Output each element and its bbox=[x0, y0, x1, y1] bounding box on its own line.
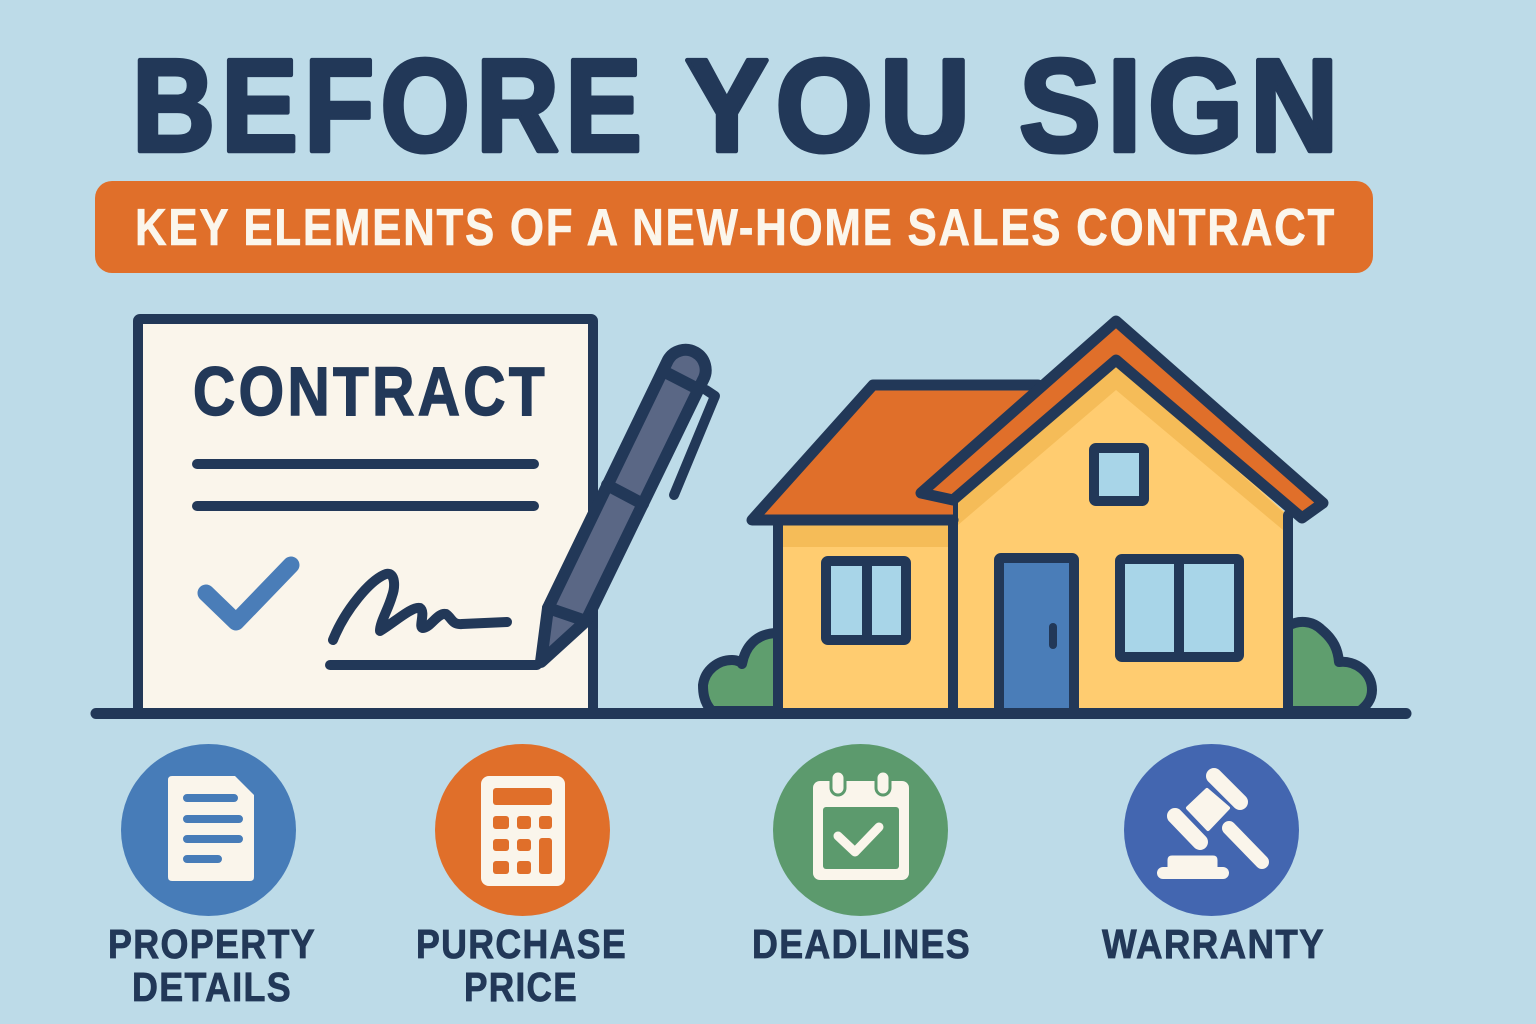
label: property details: PROPERTY bbox=[108, 921, 316, 967]
label: purchase price: PRICE bbox=[464, 964, 578, 1010]
right bush bbox=[1288, 622, 1372, 711]
signature line bbox=[330, 660, 537, 670]
label: deadlines: DEADLINES bbox=[752, 921, 971, 967]
label: purchase price bbox=[416, 921, 627, 1010]
illustration: house bbox=[703, 321, 1372, 713]
label: warranty: WARRANTY bbox=[1102, 921, 1325, 967]
pen body and cap bbox=[541, 350, 706, 662]
illustration: pen bbox=[541, 350, 715, 662]
gable shading bbox=[958, 362, 1283, 530]
pen bands bbox=[548, 371, 698, 621]
label: property details: DETAILS bbox=[132, 964, 292, 1010]
pen clip bbox=[674, 390, 715, 495]
left roof bbox=[752, 385, 1038, 520]
illustration: contract document bbox=[138, 319, 593, 713]
subtitle banner: KEY ELEMENTS OF A NEW-HOME SALES CONTRACT bbox=[135, 199, 1336, 257]
title bbox=[132, 32, 1345, 179]
signature bbox=[333, 574, 507, 640]
title: SIGN bbox=[1019, 32, 1345, 179]
blue check mark bbox=[206, 565, 291, 622]
main gable wall bbox=[953, 358, 1288, 713]
ground line bbox=[96, 708, 1406, 719]
attic window bbox=[1094, 448, 1144, 501]
title: YOU bbox=[685, 32, 977, 179]
left wall bbox=[778, 520, 953, 713]
label: purchase price: PURCHASE bbox=[416, 921, 627, 967]
main roof bbox=[921, 321, 1323, 518]
contract heading: CONTRACT bbox=[193, 353, 548, 430]
icon: deadlines bbox=[773, 744, 948, 916]
subtitle banner bbox=[95, 181, 1373, 273]
left window bbox=[826, 561, 906, 640]
door bbox=[999, 558, 1074, 713]
right window bbox=[1120, 559, 1239, 657]
contract text lines bbox=[197, 464, 534, 506]
icon: property details bbox=[121, 744, 296, 916]
title: BEFORE bbox=[132, 32, 648, 179]
left bush bbox=[703, 633, 778, 711]
wall outlines bbox=[778, 500, 1288, 713]
icon: warranty bbox=[1124, 744, 1299, 916]
icon: purchase price bbox=[435, 744, 610, 916]
label: property details bbox=[108, 921, 316, 1010]
